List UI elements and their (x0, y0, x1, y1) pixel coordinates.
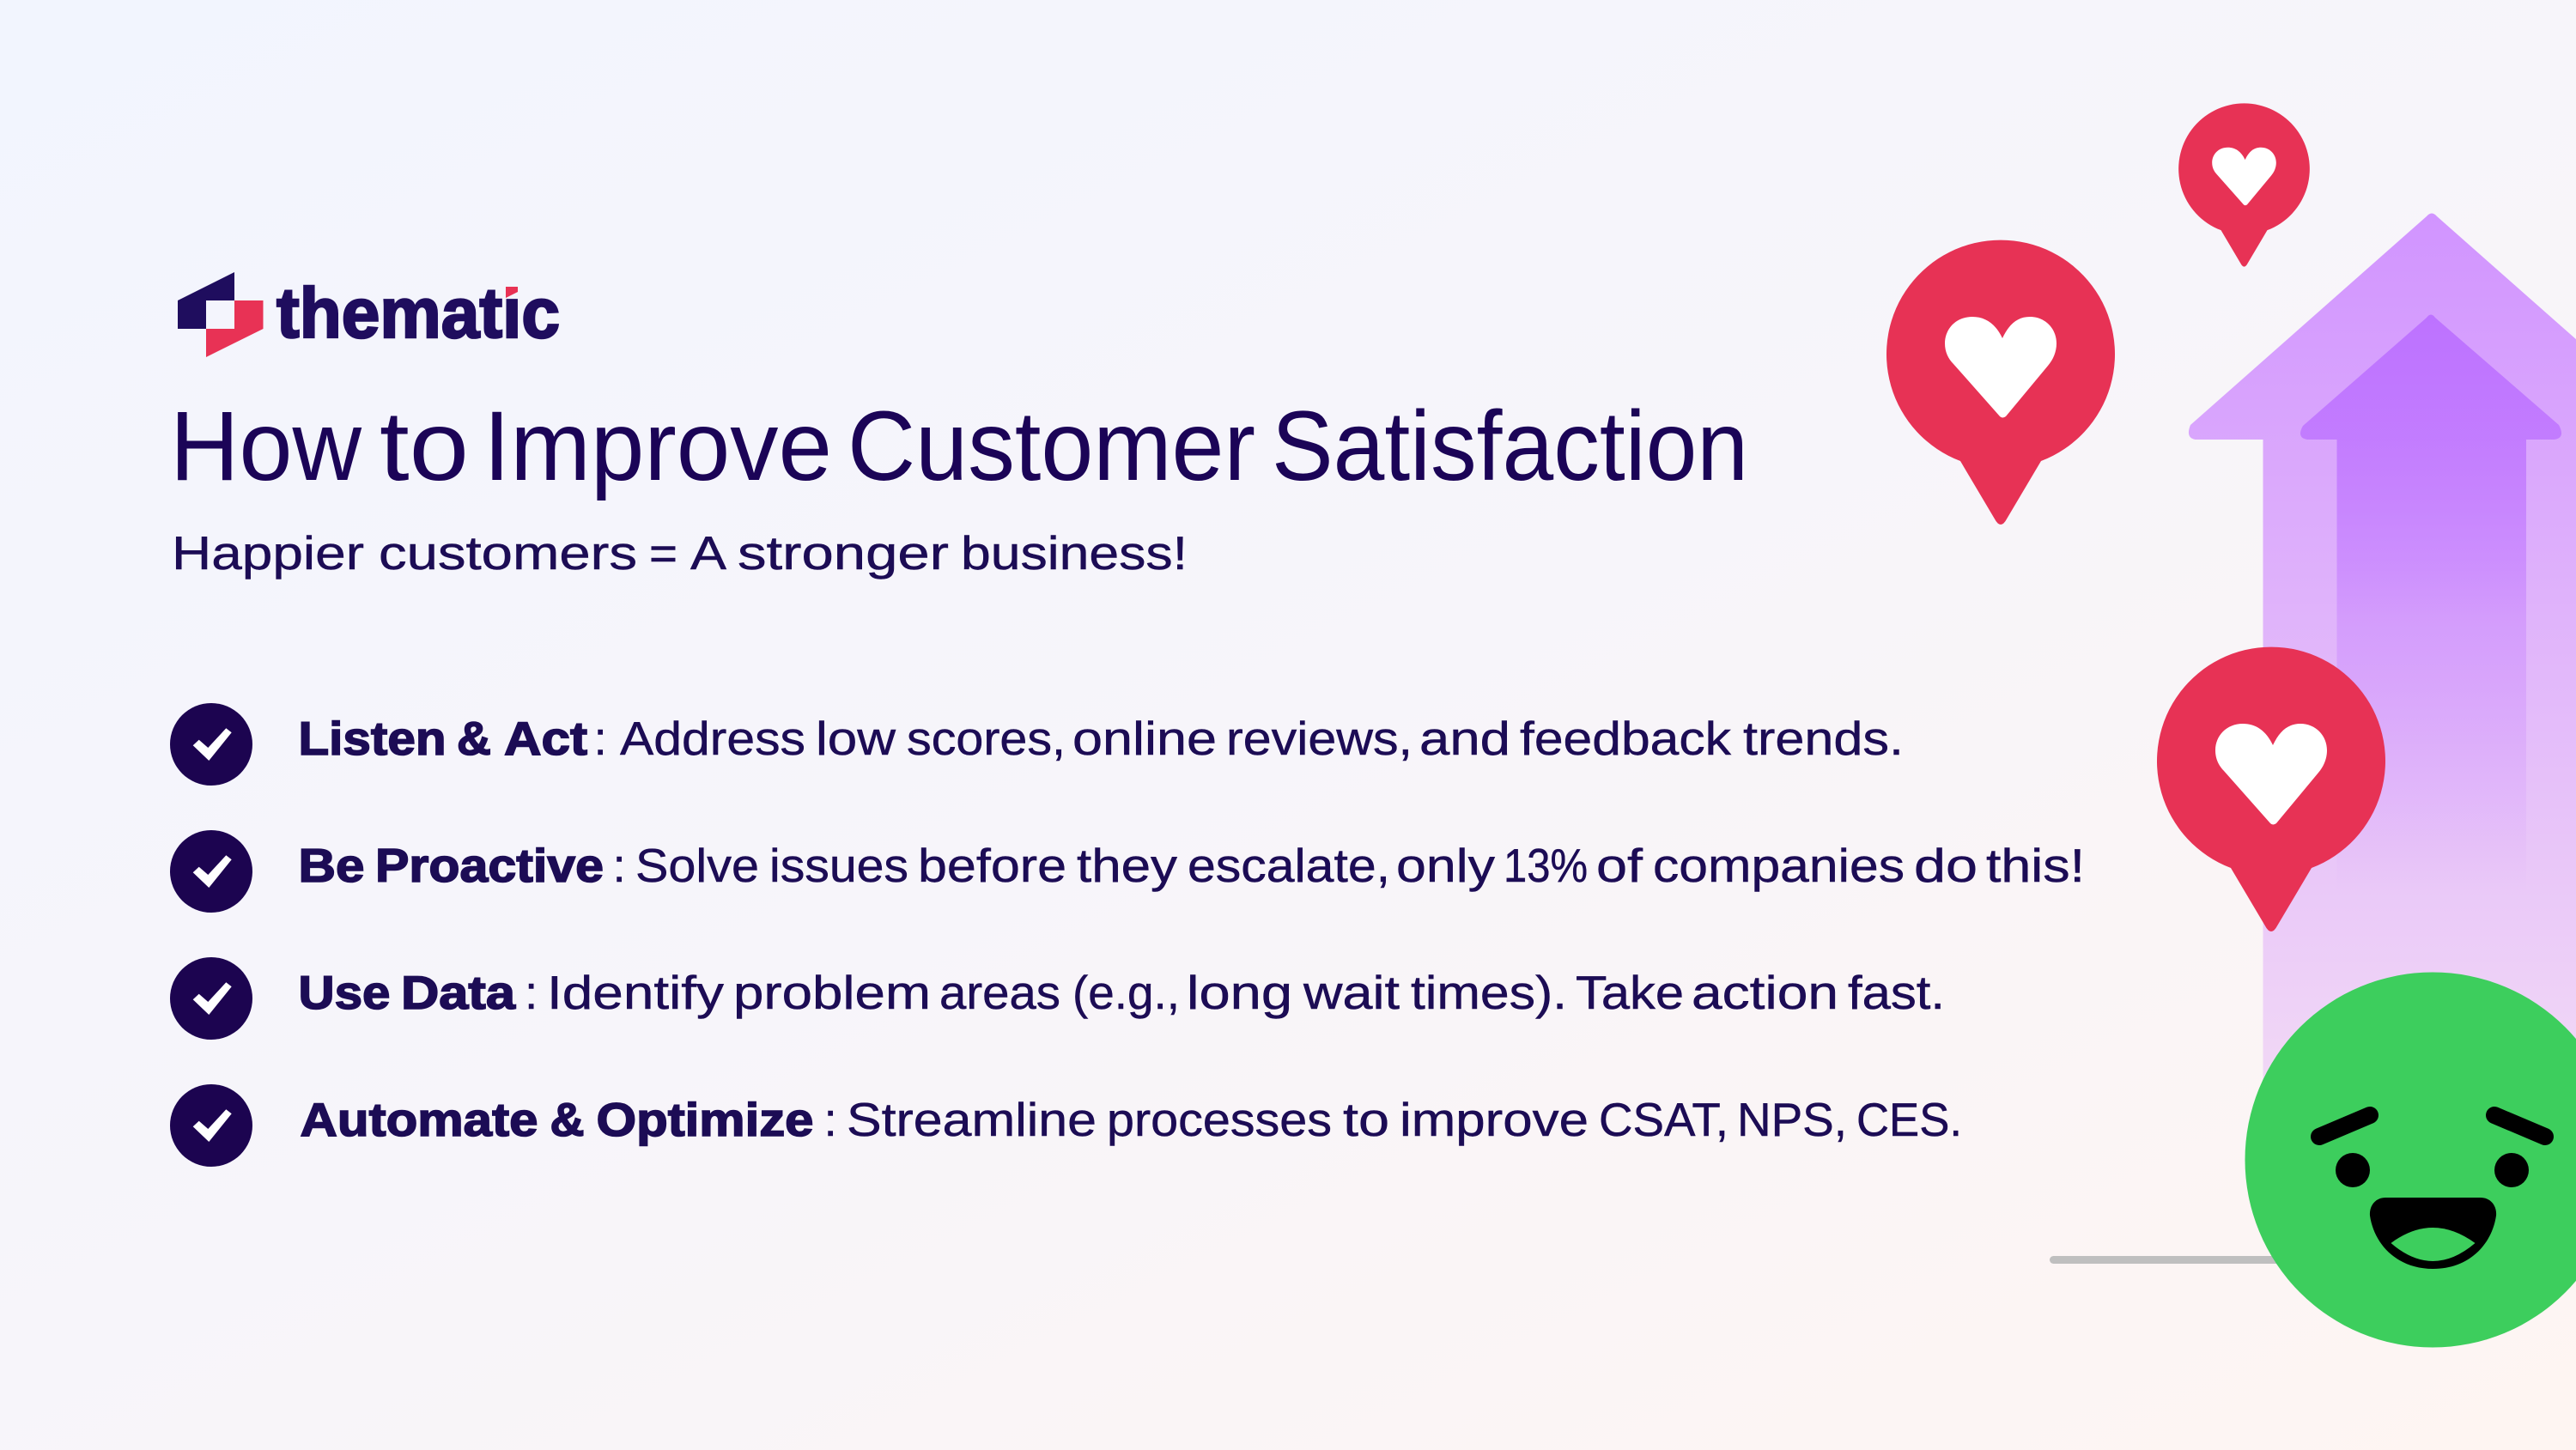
subtitle: business! (961, 526, 1188, 579)
item text: Automate (301, 1093, 538, 1146)
title (170, 391, 1748, 501)
subtitle: Happier (172, 526, 364, 579)
item text: : (525, 966, 538, 1019)
item text: companies (1653, 839, 1905, 892)
subtitle: A (690, 526, 726, 579)
logo wordmark: thematic (276, 273, 560, 353)
item text: Data (401, 966, 515, 1019)
icon: check circle (170, 957, 252, 1040)
item text: problem (733, 966, 931, 1019)
item text: CSAT, (1599, 1093, 1728, 1146)
item text: trends. (1743, 712, 1904, 765)
ground line (2050, 1256, 2307, 1264)
item text: : (824, 1093, 837, 1146)
item text: Listen (299, 712, 447, 765)
item text: wait (1303, 966, 1400, 1019)
title: Customer (848, 391, 1255, 501)
title: to (380, 391, 469, 501)
item text (299, 839, 2085, 892)
item text: Identify (547, 966, 725, 1019)
icon: large heart pin (1886, 240, 2115, 525)
item text: Address (620, 712, 805, 765)
item text: : (613, 839, 626, 892)
item text: Proactive (375, 839, 604, 892)
item text (299, 712, 1904, 765)
item text: improve (1400, 1093, 1589, 1146)
item text: only (1396, 839, 1496, 892)
list item: Automate & Optimize (170, 1084, 1962, 1167)
icon: small heart pin (2178, 103, 2310, 267)
subtitle: customers (379, 526, 637, 579)
item text: 13% (1504, 839, 1588, 892)
title: Satisfaction (1272, 391, 1748, 501)
item text: action (1692, 966, 1838, 1019)
item text: times). (1411, 966, 1567, 1019)
item text: Streamline (847, 1093, 1097, 1146)
left eyebrow (2319, 1115, 2370, 1137)
icon: check circle (170, 830, 252, 913)
logo: thematic (178, 272, 560, 357)
arrow: large outer up arrow (2189, 213, 2576, 1202)
item text: to (1343, 1093, 1389, 1146)
item text: reviews, (1226, 712, 1413, 765)
right eyebrow (2494, 1115, 2545, 1137)
icon: check circle (170, 703, 252, 786)
logo mark (178, 272, 263, 357)
tongue (2391, 1228, 2475, 1261)
item text: Solve (635, 839, 759, 892)
item text: Optimize (596, 1093, 814, 1146)
item text: feedback (1520, 712, 1732, 765)
item text: issues (769, 839, 908, 892)
item text: (e.g., (1072, 966, 1180, 1019)
list item: Listen & Act (170, 703, 1904, 786)
item text: low (816, 712, 896, 765)
item text: escalate, (1188, 839, 1390, 892)
item text: & (457, 712, 491, 765)
subtitle (172, 526, 1188, 579)
icon: happy green face (2245, 972, 2576, 1348)
item text (299, 966, 1945, 1019)
item text: do (1914, 839, 1978, 892)
item text: Take (1576, 966, 1684, 1019)
item text: online (1072, 712, 1217, 765)
title: How (170, 391, 362, 501)
item text: Use (299, 966, 390, 1019)
title: Improve (483, 391, 832, 501)
item text: Act (504, 712, 587, 765)
icon: check circle (170, 1084, 252, 1167)
item text: of (1596, 839, 1643, 892)
item text: fast. (1848, 966, 1945, 1019)
item text: processes (1107, 1093, 1332, 1146)
item text: they (1077, 839, 1178, 892)
item text: CES. (1856, 1093, 1962, 1146)
icon: middle heart pin (2157, 647, 2385, 931)
item text: & (550, 1093, 584, 1146)
left eye (2336, 1153, 2370, 1187)
right eye (2494, 1153, 2529, 1187)
item text: this! (1986, 839, 2085, 892)
list item: Use Data (170, 957, 1945, 1040)
item text: : (594, 712, 607, 765)
item text: NPS, (1737, 1093, 1847, 1146)
subtitle: = (649, 526, 677, 579)
item text: Be (299, 839, 364, 892)
arrow: inner up arrow (2300, 314, 2561, 893)
list item: Be Proactive (170, 830, 2085, 913)
item text: scores, (907, 712, 1066, 765)
item text (301, 1093, 1962, 1146)
subtitle: stronger (738, 526, 949, 579)
mouth (2370, 1198, 2496, 1269)
item text: areas (939, 966, 1060, 1019)
item text: before (918, 839, 1066, 892)
item text: and (1419, 712, 1510, 765)
item text: long (1187, 966, 1292, 1019)
